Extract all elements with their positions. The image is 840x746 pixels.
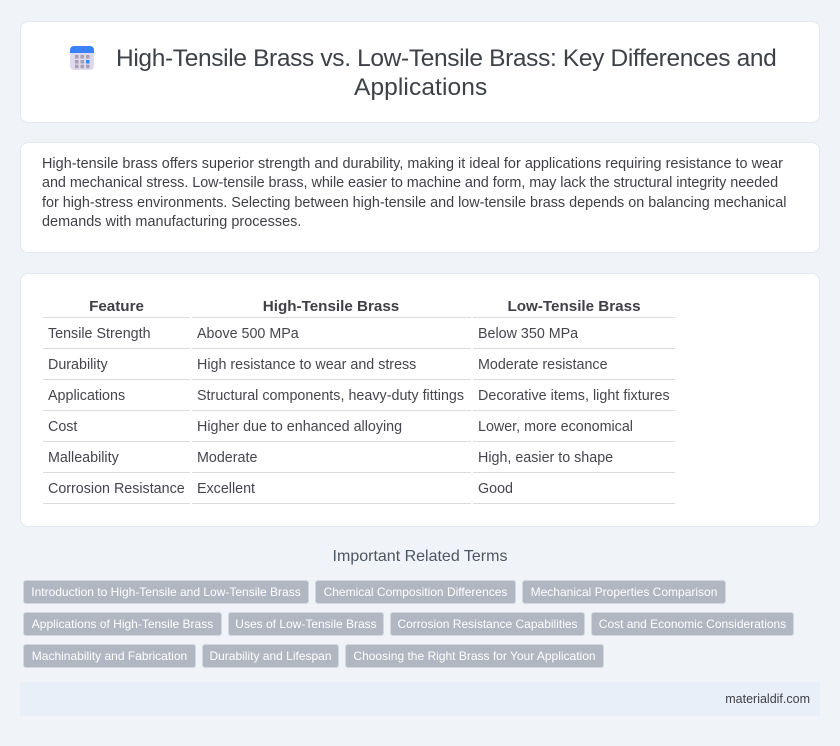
related term tags: Durability and Lifespan [209, 649, 332, 663]
comparison table: Structural components, heavy-duty fittings [197, 388, 464, 404]
related term tags: Mechanical Properties Comparison [531, 585, 717, 599]
panel: title card [20, 21, 820, 123]
comparison table: High, easier to shape [478, 450, 613, 466]
heading: related terms: Important Related Terms [333, 548, 507, 565]
related term tags: Uses of Low-Tensile Brass [235, 617, 377, 631]
comparison table: Tensile Strength [48, 326, 151, 342]
comparison table: Moderate [197, 450, 257, 466]
related term tags [23, 580, 794, 668]
summary text: for high-stress environments. Selecting between high-tensile and low-tensile brass depends on balancing mechanical [42, 195, 786, 211]
comparison table: Corrosion Resistance [48, 481, 185, 497]
comparison table: Good [478, 481, 513, 497]
comparison table: Lower, more economical [478, 419, 633, 435]
footer source text: materialdif.com [725, 692, 810, 706]
comparison table: Higher due to enhanced alloying [197, 419, 402, 435]
comparison table: Durability [48, 357, 108, 373]
comparison table [43, 298, 675, 504]
comparison table: Feature [89, 298, 144, 315]
comparison table: Low-Tensile Brass [507, 298, 641, 315]
summary text: High-tensile brass offers superior strength and durability, making it ideal for applications requiring resistance to wear [42, 156, 783, 172]
comparison table: Cost [48, 419, 77, 435]
comparison table: Above 500 MPa [197, 326, 299, 342]
comparison table: High resistance to wear and stress [197, 357, 416, 373]
panel: summary card [20, 142, 820, 253]
comparison table: Moderate resistance [478, 357, 608, 373]
summary text: demands with manufacturing processes. [42, 214, 301, 230]
title [116, 45, 776, 101]
summary text: and mechanical stress. Low-tensile brass, while easier to machine and form, may lack the structural integrity needed [42, 175, 778, 191]
summary text [42, 156, 786, 230]
related term tags: Corrosion Resistance Capabilities [397, 617, 578, 631]
related term tags: Chemical Composition Differences [324, 585, 507, 599]
comparison table: Below 350 MPa [478, 326, 578, 342]
comparison table: Applications [48, 388, 125, 404]
related term tags: Introduction to High-Tensile and Low-Tensile Brass [31, 585, 301, 599]
title: Applications [354, 74, 487, 101]
related term tags: Cost and Economic Considerations [599, 617, 786, 631]
panel: comparison table card [20, 273, 820, 527]
related term tags: Machinability and Fabrication [32, 649, 187, 663]
comparison table: Decorative items, light fixtures [478, 388, 670, 404]
comparison table: High-Tensile Brass [263, 298, 399, 315]
icon: calendar grid [70, 46, 94, 70]
footer bar [20, 682, 820, 716]
related term tags: Choosing the Right Brass for Your Application [353, 649, 596, 663]
related term tags: Applications of High-Tensile Brass [32, 617, 213, 631]
comparison table: Excellent [197, 481, 255, 497]
title: High-Tensile Brass vs. Low-Tensile Brass: Key Differences and [116, 45, 776, 72]
comparison table: Malleability [48, 450, 119, 466]
